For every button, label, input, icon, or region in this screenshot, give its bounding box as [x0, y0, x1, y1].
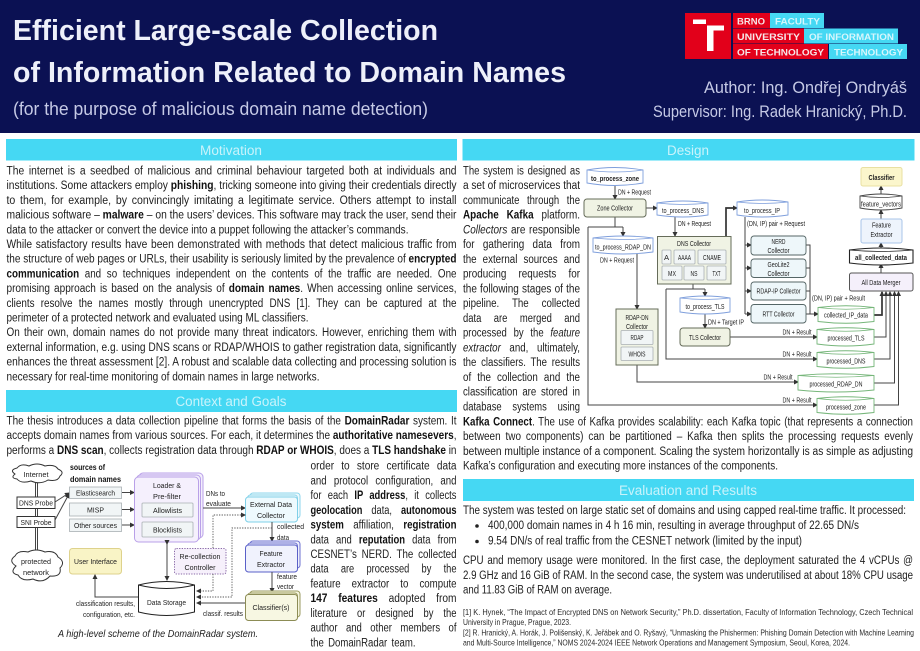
text block: motivation body: While satisfactory results have been demonstrated with methods that detect malicious traffic from [6, 239, 456, 251]
box: GeoLite2 collector: GeoLite2 [768, 260, 790, 269]
box: Feature Extractor: Extractor [257, 560, 285, 569]
arrows: IP queue to collectors [745, 217, 751, 314]
text block: context details [310, 461, 457, 649]
text block: design column: Apache Kafka platform. [463, 210, 580, 222]
box: RDAP-IP collector: RDAP-IP Collector [756, 286, 801, 296]
arrows: processed data to merger [874, 292, 898, 405]
panel: context and goals [6, 390, 457, 649]
subtitle: (for the purpose of malicious domain name detection) [13, 99, 428, 119]
box: user interface [70, 548, 122, 574]
store: collected_IP_data: collected_IP_data [824, 310, 869, 320]
arrow: loader to storage [166, 544, 168, 580]
box: zone collector: Zone Collector [597, 204, 633, 212]
box: re-collection controller: Controller [184, 563, 216, 572]
store: processed_RDAP_DN [798, 374, 874, 392]
store: processed_DNS: processed_DNS [826, 356, 866, 366]
box: user interface: User Interface [74, 557, 117, 566]
box: External Data Collector: External Data [250, 500, 293, 509]
list: throughput results: 400,000 domain names in 4 h 16 min, resulting in average throughput of 22.65 DN/s [488, 520, 859, 532]
box: other sources [70, 519, 122, 532]
text block: context details: system affiliation, registration [310, 520, 456, 532]
logo: Brno University of Technology [685, 13, 907, 59]
text block: motivation body: data to the attacker or convert the device into a puppet following the attacker’s commands. [6, 224, 408, 236]
queue: to_process_IP: to_process_IP [744, 206, 780, 215]
store: all_collected_data: all_collected_data [855, 253, 908, 262]
icon: internet cloud [12, 464, 62, 483]
box: TLS collector [680, 328, 730, 346]
text block: design column: a set of microservices that [463, 180, 581, 192]
label: DN + Request: DN + Request [678, 219, 711, 228]
store: all_collected_data [850, 248, 913, 265]
store: processed_TLS: processed_TLS [828, 334, 864, 342]
text block: context intro [6, 416, 457, 457]
icon: protected network cloud: network [23, 568, 49, 577]
arrow: feature vector [272, 572, 297, 592]
store: processed_DNS [817, 351, 874, 368]
labels: DN + Result: DN + Result [782, 396, 812, 404]
text block: motivation body [6, 166, 457, 384]
arrow: storage to user interface [76, 575, 138, 619]
heading: context and goals [6, 390, 457, 412]
box: DNS collector: CNAME [703, 253, 721, 262]
text block: motivation body: external information, e.g. using DNS scans or RDAP/WHOIS to gather registration data, significantly [6, 342, 457, 354]
box: DNS collector: A [664, 253, 670, 262]
box: MISP [70, 503, 122, 516]
text block: design column: the following stages of the [463, 284, 580, 296]
text block: motivation body: the structure of web pages or URLs, their usability is seriously limited by the prevalence of encrypted [6, 254, 456, 266]
logo: Brno University of Technology: BRNO [737, 16, 765, 28]
box: classifier: Classifier [868, 173, 895, 182]
box: blocklists: Blocklists [153, 526, 182, 534]
arrow: DNs to evaluate: DNs to [206, 489, 225, 498]
header banner [0, 0, 920, 133]
text block: design column: classification are stored in [463, 387, 580, 399]
arrows: dotted control flows [197, 515, 272, 597]
queue: to_process_TLS: to_process_TLS [686, 302, 724, 311]
list: throughput results: 9.54 DN/s of real traffic from the CESNET network (limited by the input) [488, 536, 802, 548]
text block: resource usage: and 11.83 GiB of RAM on average. [463, 585, 612, 597]
logo: Brno University of Technology: OF TECHNOLOGY [737, 48, 825, 58]
box: DNS collector: MX [668, 269, 676, 278]
text block: design column: of the collection and the [463, 372, 580, 384]
text block: context details: order to store certificate data [310, 461, 457, 473]
labels: DN + Result: DN + Result [764, 372, 792, 382]
database: data storage: Data Storage [147, 598, 186, 607]
heading: evaluation and results [463, 479, 914, 501]
box: RDAP-DN collector: RDAP-DN [626, 313, 648, 322]
heading: sources of domain names: domain names [70, 475, 122, 484]
text block: design column: the external sources and [463, 254, 580, 266]
text block: references: University in Prague, Prague, 2023. [463, 617, 571, 627]
box: all data merger: All Data Merger [862, 278, 901, 287]
arrow: collected data [272, 522, 304, 542]
labels: DN + Result: DN + Result [782, 350, 812, 358]
heading: evaluation and results: Evaluation and Results [619, 483, 757, 498]
title: of Information Related to Domain Names [13, 57, 566, 89]
database: data storage [138, 582, 194, 616]
text block: context details: literature or designed by the [310, 608, 456, 620]
text block: design column: pipeline. The collected [463, 298, 580, 310]
text block: design full width: Kafka’s configuration and executing more instances of the components. [463, 461, 778, 473]
text block: context details: data and reputation data from [310, 534, 456, 546]
heading: design [462, 139, 914, 160]
text block: motivation body: to them, for example, by convincingly imitating a legitimate service. Others attempt to install [6, 195, 456, 207]
box: GeoLite2 collector [751, 259, 806, 278]
store: collected_IP_data [818, 306, 874, 323]
label: DN + Target IP: DN + Target IP [708, 318, 744, 326]
text block: design column: producing requests for [463, 269, 580, 281]
box: External Data Collector: Collector [257, 511, 285, 520]
box: RDAP-DN collector: WHOIS [628, 350, 646, 358]
text block: motivation body: On their own, domain names do not provide many threat indicators. However, enriching them with [6, 327, 456, 339]
connectors: collector outputs [588, 217, 818, 405]
queue: to_process_DNS [657, 201, 708, 217]
box: NERD collector [751, 236, 806, 255]
box: RDAP-DN collector: RDAP [630, 333, 644, 342]
text block: context details: author and other members of [310, 623, 457, 635]
text block: context intro: accepts domain names from various sources. For each, it determines the authoritative namesevers, [6, 430, 457, 442]
icon: internet cloud: Internet [24, 470, 49, 479]
heading: sources of domain names [70, 463, 122, 484]
panel: motivation [6, 139, 457, 384]
box: other sources: Other sources [74, 521, 117, 530]
queue: to_process_zone: to_process_zone [591, 174, 639, 183]
box: zone collector [584, 199, 646, 217]
box: re-collection controller [174, 548, 226, 574]
logo: Brno University of Technology: OF INFORMATION [809, 32, 894, 43]
box: DNS collector: TXT [712, 269, 721, 278]
box: RTT collector: RTT Collector [762, 310, 795, 318]
box: Elasticsearch: Elasticsearch [76, 488, 115, 498]
store: processed_RDAP_DN: processed_RDAP_DN [810, 380, 862, 388]
text block: motivation body: communication and so techniques independent on the contents of the traffic are needed. One [6, 268, 456, 280]
box: DNS collector: NS [690, 269, 698, 278]
box: classifiers: Classifier(s) [252, 603, 290, 612]
arrows: sources to loader [122, 492, 134, 525]
box: NERD collector: Collector [768, 246, 790, 255]
text block: context details: the DomainRadar team. [310, 637, 416, 649]
arrow: collected data: collected [277, 522, 304, 531]
box: RTT collector [751, 304, 806, 323]
label: DN, IP pair + Request: (DN, IP) pair + Request [747, 219, 805, 228]
text block: references [463, 607, 914, 648]
text block: motivation body: institutions. Some attackers employ phishing, tricking someone into giving their credentials directly [6, 180, 457, 192]
store: feature_vectors: feature_vectors [861, 200, 901, 208]
text block: design column: the classifiers. The results [463, 357, 580, 369]
box: all data merger [850, 273, 913, 291]
heading: motivation: Motivation [200, 143, 262, 158]
diagram: system architecture [584, 168, 913, 414]
queue: to_process_zone [587, 168, 643, 186]
text block: design column: processed by the feature [463, 328, 580, 340]
text block: motivation body: clients resolve the names mostly through unencrypted DNS [1]. They can be captured at the [6, 298, 456, 310]
box: RDAP-DN collector [616, 309, 658, 365]
heading: design: Design [667, 143, 709, 158]
store: processed_TLS [817, 328, 874, 346]
text block: design full width [463, 416, 913, 473]
text block: design column: data are merged and [463, 313, 580, 325]
box: allowlists: Allowlists [153, 506, 182, 515]
panel: design [462, 139, 914, 473]
arrow: storage to user interface: classification results, [76, 599, 135, 608]
heading: sources of domain names: sources of [70, 463, 105, 472]
text block: design column: communicate through the [463, 195, 580, 207]
logo: Brno University of Technology: FACULTY [775, 16, 821, 28]
queue: to_process_RDAP_DN [593, 236, 653, 254]
box: Loader and Pre-filter [134, 473, 203, 542]
box: feature extractor: Extractor [870, 230, 893, 239]
text block: context intro: The thesis introduces a data collection pipeline that forms the basis of the DomainRadar system. It [6, 416, 457, 428]
arrow: feature vector: vector [277, 582, 295, 591]
heading: context and goals: Context and Goals [176, 394, 287, 409]
box: classifier [861, 168, 902, 186]
text block: design column [463, 166, 581, 414]
arrow: classification results to storage: classif. results [203, 609, 243, 618]
arrows: zone and DNS flow [615, 185, 737, 328]
arrows: pipeline upward [880, 186, 882, 273]
text block: context details: data are processed by the [310, 564, 456, 576]
text block: context details: geolocation data, autonomous [310, 505, 456, 517]
text block: design column: for gathering data from [463, 239, 580, 251]
box: DNS collector [658, 236, 731, 284]
author: Author: Ing. Ondřej Ondryáš [704, 79, 907, 97]
arrow: classification results to storage [197, 603, 245, 618]
text block: motivation body: perimeter of a protected network and evaluated using ML classifiers. [6, 312, 308, 324]
box: SNI probe: SNI Probe [20, 518, 52, 527]
box: DNS collector: DNS Collector [677, 239, 711, 248]
box: Loader and Pre-filter: Loader & [153, 481, 181, 490]
label: DN + Request: DN + Request [618, 188, 651, 196]
text block: resource usage [463, 555, 913, 597]
box: Feature Extractor [246, 541, 300, 572]
box: External Data Collector [246, 493, 300, 522]
text block: context details: feature extractor to compute [310, 578, 456, 590]
icon: protected network cloud [12, 550, 63, 581]
labels: DN + Result: DN + Result [782, 328, 812, 336]
box: re-collection controller: Re-collection [180, 552, 220, 561]
arrow: DNs to evaluate [203, 489, 245, 508]
box: feature extractor [861, 219, 902, 243]
queue: to_process_IP [737, 200, 788, 217]
queue: to_process_DNS: to_process_DNS [662, 206, 704, 215]
box: Elasticsearch [70, 487, 122, 498]
arrow: storage to user interface: configuration, etc. [83, 610, 135, 619]
store: processed_zone: processed_zone [826, 402, 866, 412]
text block: motivation body: enhances the threat assessment [2]. A robust and scalable data collecting and processing solution is [6, 357, 457, 369]
box: NERD collector: NERD [772, 237, 786, 246]
logo: Brno University of Technology: UNIVERSITY [737, 32, 801, 43]
queue: to_process_TLS [680, 296, 730, 314]
box: TLS collector: TLS Collector [689, 333, 721, 342]
text block: context details: for each IP address, it collects [310, 490, 457, 502]
text block: design column: The system is designed as [463, 166, 580, 178]
text block: design column: Collectors are responsible [463, 224, 580, 236]
box: DNS probe: DNS Probe [19, 498, 53, 508]
panel: evaluation and results [463, 479, 914, 648]
text block: context details: and protocol configuration, and [310, 475, 456, 487]
text block: motivation body: promising approach is based on the analysis of domain names. When accessing online services, [6, 283, 456, 295]
box: Loader and Pre-filter: Pre-filter [153, 492, 181, 501]
box: DNS collector: AAAA [678, 253, 692, 262]
arrow: feature vector: feature [277, 572, 297, 581]
box: feature extractor: Feature [872, 220, 891, 230]
text block: context details: CESNET’s NERD. The collected [310, 549, 456, 561]
arrow: DNs to evaluate: evaluate [206, 499, 231, 508]
text block: motivation body: malicious software – malware – on the users’ devices. This software may track the user, send their [6, 210, 457, 222]
heading: motivation [6, 139, 457, 160]
store: processed_zone [817, 397, 874, 414]
label: DN, IP pair + Result: (DN, IP) pair + Result [812, 294, 865, 302]
box: RDAP-IP collector [751, 282, 806, 300]
arrows: probes to sources [55, 493, 69, 520]
box: MISP: MISP [87, 506, 104, 514]
title [13, 15, 566, 89]
text block: design column: database systems using [463, 402, 580, 414]
box: RDAP-DN collector: Collector [626, 322, 648, 331]
connector: probes trunk [36, 483, 38, 552]
text block: design column: extractor and, ultimately, [463, 342, 580, 354]
text block: motivation body: The internet is a seedbed of malicious and criminal behaviour targeted both at individuals and [6, 166, 456, 178]
logo: Brno University of Technology: TECHNOLOGY [834, 48, 904, 58]
box: Feature Extractor: Feature [260, 549, 282, 558]
caption: A high-level scheme of the DomainRadar system. [57, 628, 258, 640]
text block: context details: 147 features adopted from [310, 593, 456, 605]
arrow: collected data: data [277, 533, 289, 542]
icon: protected network cloud: protected [21, 557, 51, 566]
list: throughput results [475, 520, 859, 548]
diagram: high-level scheme of DomainRadar [12, 463, 304, 640]
store: feature_vectors [860, 194, 902, 210]
labels: DN + Result [764, 328, 812, 404]
box: GeoLite2 collector: Collector [768, 269, 790, 278]
queue: to_process_RDAP_DN: to_process_RDAP_DN [595, 242, 651, 252]
title: Efficient Large-scale Collection [13, 15, 438, 47]
text block: context intro: performs a DNS scan, collects registration data through RDAP or WHOIS, does a TLS handshake in [6, 445, 457, 457]
box: classifiers [246, 591, 300, 620]
label: DN + Request: DN + Request [600, 256, 634, 264]
text block: motivation body: necessary for real-time monitoring of domain names in large networks. [6, 372, 320, 384]
